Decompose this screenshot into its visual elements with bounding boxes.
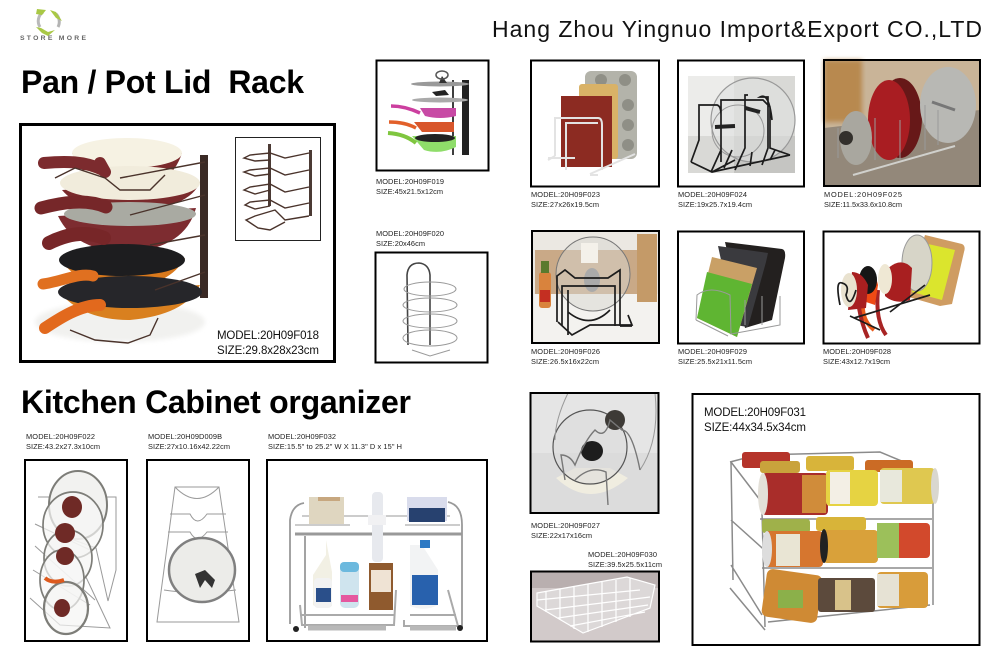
label: F020: MODEL:20H09F020 — [376, 229, 444, 238]
canned food row 3 — [761, 568, 928, 624]
label: F018 model and size — [217, 330, 319, 357]
label: F019 — [376, 177, 444, 196]
panel: F027 lid holder photo — [530, 393, 658, 513]
label: F027: MODEL:20H09F027 — [531, 521, 600, 530]
label: F032: MODEL:20H09F032 — [268, 432, 336, 441]
label: F026: MODEL:20H09F026 — [531, 347, 600, 356]
label: F020 — [376, 229, 444, 248]
label: F031 — [704, 407, 806, 434]
stacked pans illustration — [35, 138, 205, 343]
label: F023: SIZE:27x26x19.5cm — [531, 200, 599, 209]
heading: kitchen cabinet organizer: Kitchen Cabinet organizer — [21, 384, 411, 420]
label: F020: SIZE:20x46cm — [376, 239, 425, 248]
label: F032 — [268, 432, 402, 451]
label: F030: MODEL:20H09F030 — [588, 550, 657, 559]
panel: F029 green board rack — [678, 232, 804, 344]
panel: F024 black lid rack — [678, 60, 804, 186]
label: F023 — [531, 190, 600, 209]
label: F029 — [678, 347, 752, 366]
label: F024 — [678, 190, 752, 209]
label: F023: MODEL:20H09F023 — [531, 190, 600, 199]
label: F032: SIZE:15.5" to 25.2" W X 11.3" D x 15" H — [268, 442, 402, 451]
panel: F028 pots and boards rack — [824, 232, 980, 344]
label: F026: SIZE:26.5x16x22cm — [531, 357, 599, 366]
panel: F023 board rack — [531, 60, 659, 186]
label: F025: SIZE:11.5x33.6x10.8cm — [824, 200, 902, 209]
canned food row 1 — [758, 468, 939, 515]
label: F019: SIZE:45x21.5x12cm — [376, 187, 443, 196]
label: F024: MODEL:20H09F024 — [678, 190, 747, 199]
panel: main pan rack F018 — [20, 124, 334, 362]
label: F009B: SIZE:27x10.16x42.22cm — [148, 442, 230, 451]
canned food back row — [742, 452, 913, 473]
label: F024: SIZE:19x25.7x19.4cm — [678, 200, 752, 209]
label: F028 — [823, 347, 891, 366]
panel: F009B trapezoid lid rack — [147, 460, 249, 641]
label: F027: SIZE:22x17x16cm — [531, 531, 592, 540]
company name header: Hang Zhou Yingnuo Import&Export CO.,LTD — [492, 16, 982, 42]
logo: store more: STORE MORE — [20, 35, 86, 42]
label: F030 — [588, 550, 662, 569]
label: F022: SIZE:43.2x27.3x10cm — [26, 442, 100, 451]
panel: F022 wall lid rack — [25, 460, 127, 641]
label: F028: MODEL:20H09F028 — [823, 347, 891, 356]
label: F018 model and size: MODEL:20H09F018 — [217, 330, 319, 342]
panel: F020 round rack — [376, 252, 488, 362]
heading: pan / pot lid rack: Pan / Pot Lid Rack — [21, 64, 304, 100]
label: F009B: MODEL:20H09D009B — [148, 432, 222, 441]
panel: F031 can rack — [692, 394, 980, 645]
panel: F026 black lid rack photo — [532, 231, 659, 343]
label: F029: MODEL:20H09F029 — [678, 347, 747, 356]
label: F019: MODEL:20H09F019 — [376, 177, 444, 186]
label: F009B — [148, 432, 230, 451]
label: F030: SIZE:39.5x25.5x11cm — [588, 560, 662, 569]
panel: F030 white wire basket — [531, 572, 659, 642]
label: F028: SIZE:43x12.7x19cm — [823, 357, 890, 366]
label: F029: SIZE:25.5x21x11.5cm — [678, 357, 752, 366]
canned food row 2 — [762, 517, 930, 567]
panel: F032 under-sink shelf — [267, 460, 487, 641]
label: F025: MODEL:20H09F025 — [824, 190, 902, 199]
panel: F025 lids on rack photo — [824, 60, 980, 186]
rack post — [200, 155, 208, 298]
label: F018 model and size: SIZE:29.8x28x23cm — [217, 345, 319, 357]
label: F031: SIZE:44x34.5x34cm — [704, 422, 806, 434]
logo: store more — [20, 9, 86, 42]
label: F026 — [531, 347, 600, 366]
panel: F019 rack — [376, 60, 488, 170]
wire frame — [730, 452, 933, 630]
inset: rack outline — [236, 138, 320, 240]
label: F025 — [824, 190, 902, 209]
label: F022: MODEL:20H09F022 — [26, 432, 95, 441]
label: F027 — [531, 521, 600, 540]
label: F031: MODEL:20H09F031 — [704, 407, 806, 419]
label: F022 — [26, 432, 100, 451]
